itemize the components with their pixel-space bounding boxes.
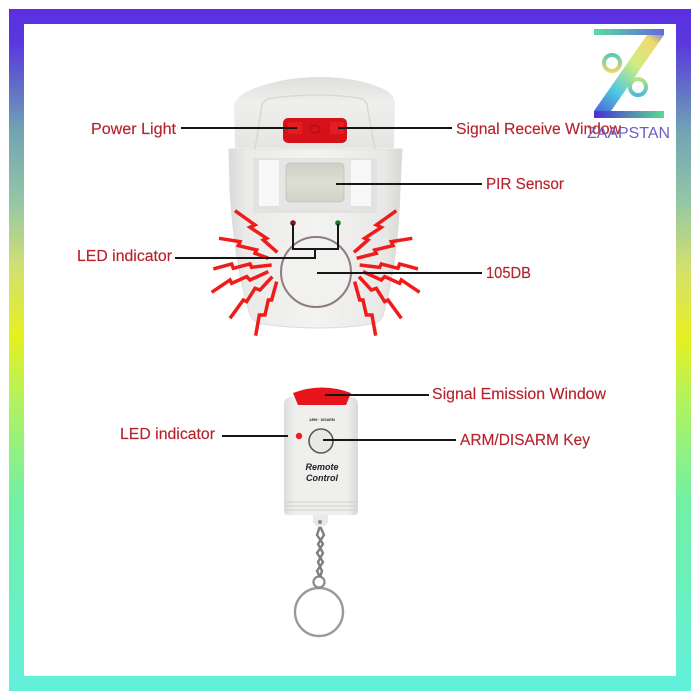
label: LED indicator top: LED indicator	[77, 248, 172, 265]
remote body	[284, 397, 358, 515]
label: 105DB: 105DB	[486, 265, 531, 282]
label: Signal Emission Window: Signal Emission Window	[432, 386, 607, 403]
logo: ZAAPSTAN	[587, 29, 670, 142]
green LED dot	[335, 220, 341, 226]
small link ring	[314, 576, 324, 588]
logo percent ring upper	[604, 55, 620, 71]
logo percent ring lower	[630, 79, 646, 95]
label: PIR Sensor: PIR Sensor	[486, 176, 564, 193]
device head	[234, 77, 395, 148]
ARM DISARM key	[309, 429, 333, 453]
chain	[317, 526, 324, 577]
label: Power Light: Power Light	[91, 121, 177, 138]
motion sensor alarm device	[212, 77, 420, 336]
label: ARM/DISARM Key: ARM/DISARM Key	[460, 432, 590, 449]
device body	[229, 149, 402, 328]
key ring	[295, 588, 343, 636]
remote tab	[313, 514, 328, 527]
remote control printed text line 2: Control	[306, 473, 338, 483]
LED dot	[296, 433, 302, 439]
logo bottom bar	[594, 111, 664, 118]
PIR frame	[253, 158, 377, 213]
remote control printed text: Remote	[305, 462, 339, 472]
red sound bolts	[212, 211, 420, 336]
red LED dot	[290, 220, 296, 226]
label: LED indicator remote: LED indicator	[120, 426, 215, 443]
speaker ring	[281, 237, 351, 307]
ARM DISARM tiny label: ARM · DISARM	[309, 418, 335, 422]
logo top bar	[594, 29, 664, 35]
red power light window	[283, 118, 347, 143]
logo wordmark: ZAAPSTAN	[587, 125, 670, 142]
remote control	[284, 388, 358, 636]
PIR sensor lens	[286, 163, 344, 202]
leader lines	[175, 128, 482, 440]
body ribs	[285, 502, 357, 510]
red signal emission window	[293, 388, 351, 405]
label: Signal Receive Window: Signal Receive Window	[456, 121, 622, 138]
logo diagonal	[594, 35, 664, 111]
